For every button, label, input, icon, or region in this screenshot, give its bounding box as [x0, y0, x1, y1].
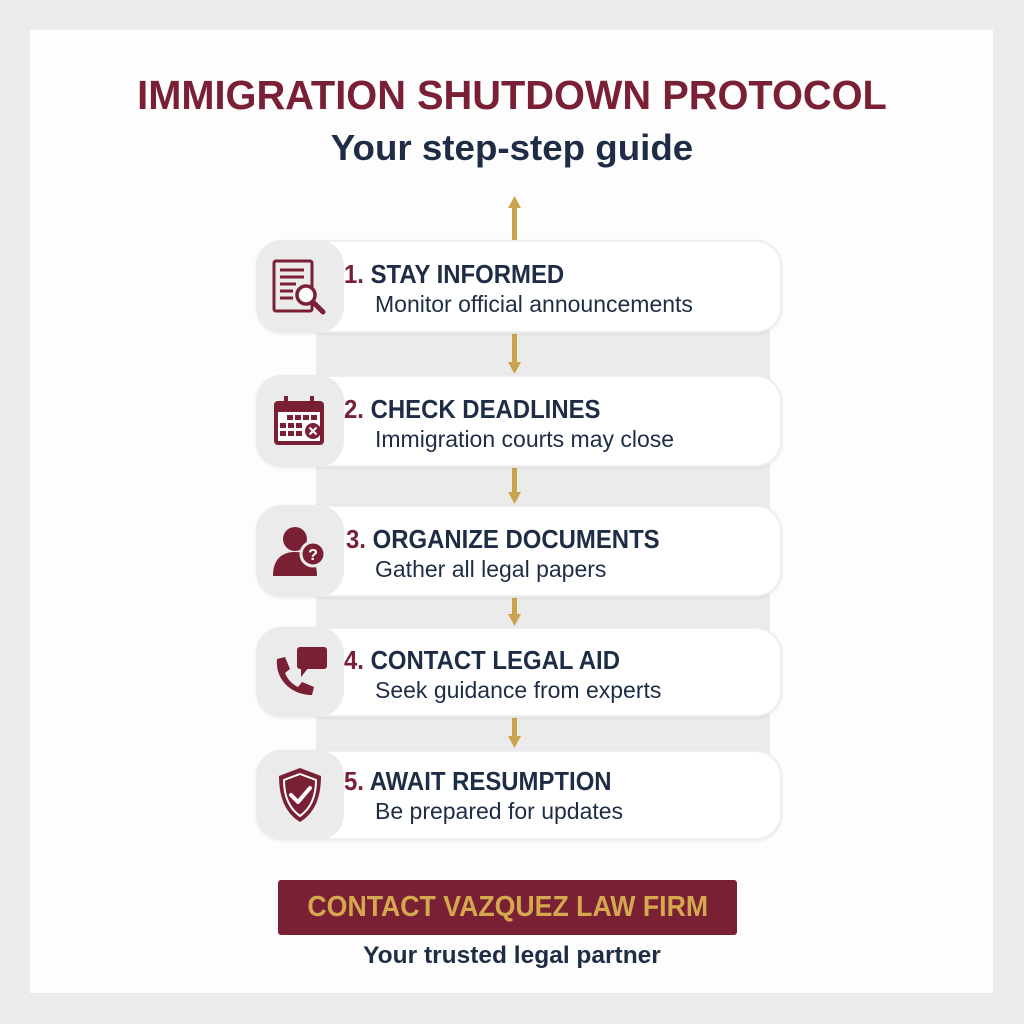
description: Gather all legal papers: [375, 556, 606, 582]
card: step 2: [256, 375, 782, 467]
description: Immigration courts may close: [375, 426, 674, 452]
title: IMMIGRATION SHUTDOWN PROTOCOL: [137, 72, 887, 118]
description: Be prepared for updates: [375, 798, 623, 824]
subtitle: Your step-step guide: [331, 127, 693, 168]
arrow: 1 to 2: [508, 334, 521, 374]
arrow: 4 to 5: [508, 718, 521, 748]
icon: person question: [256, 505, 344, 597]
icon: calendar: [256, 375, 344, 467]
footer tagline: Your trusted legal partner: [363, 942, 661, 969]
description: Seek guidance from experts: [375, 677, 661, 703]
icon: person question: ?: [308, 547, 318, 564]
heading: 4. CONTACT LEGAL AID: [344, 645, 620, 675]
icon: phone chat: [256, 627, 344, 717]
call to action button: [278, 880, 737, 935]
card: step 3: [256, 505, 782, 597]
heading: 2. CHECK DEADLINES: [344, 394, 601, 424]
arrow: 3 to 4: [508, 598, 521, 626]
description: Monitor official announcements: [375, 291, 693, 317]
heading: 3. ORGANIZE DOCUMENTS: [346, 524, 660, 554]
icon: shield check: [256, 750, 344, 840]
connector band: [316, 330, 770, 820]
call to action button: CONTACT VAZQUEZ LAW FIRM: [307, 891, 708, 923]
card: step 5: [256, 750, 782, 840]
arrow: top up: [508, 196, 521, 240]
card: step 1: [256, 240, 782, 333]
card: step 4: [256, 627, 782, 717]
arrow: 2 to 3: [508, 468, 521, 504]
heading: 1. STAY INFORMED: [344, 259, 564, 289]
icon: document search: [256, 240, 344, 333]
heading: 5. AWAIT RESUMPTION: [344, 766, 612, 796]
